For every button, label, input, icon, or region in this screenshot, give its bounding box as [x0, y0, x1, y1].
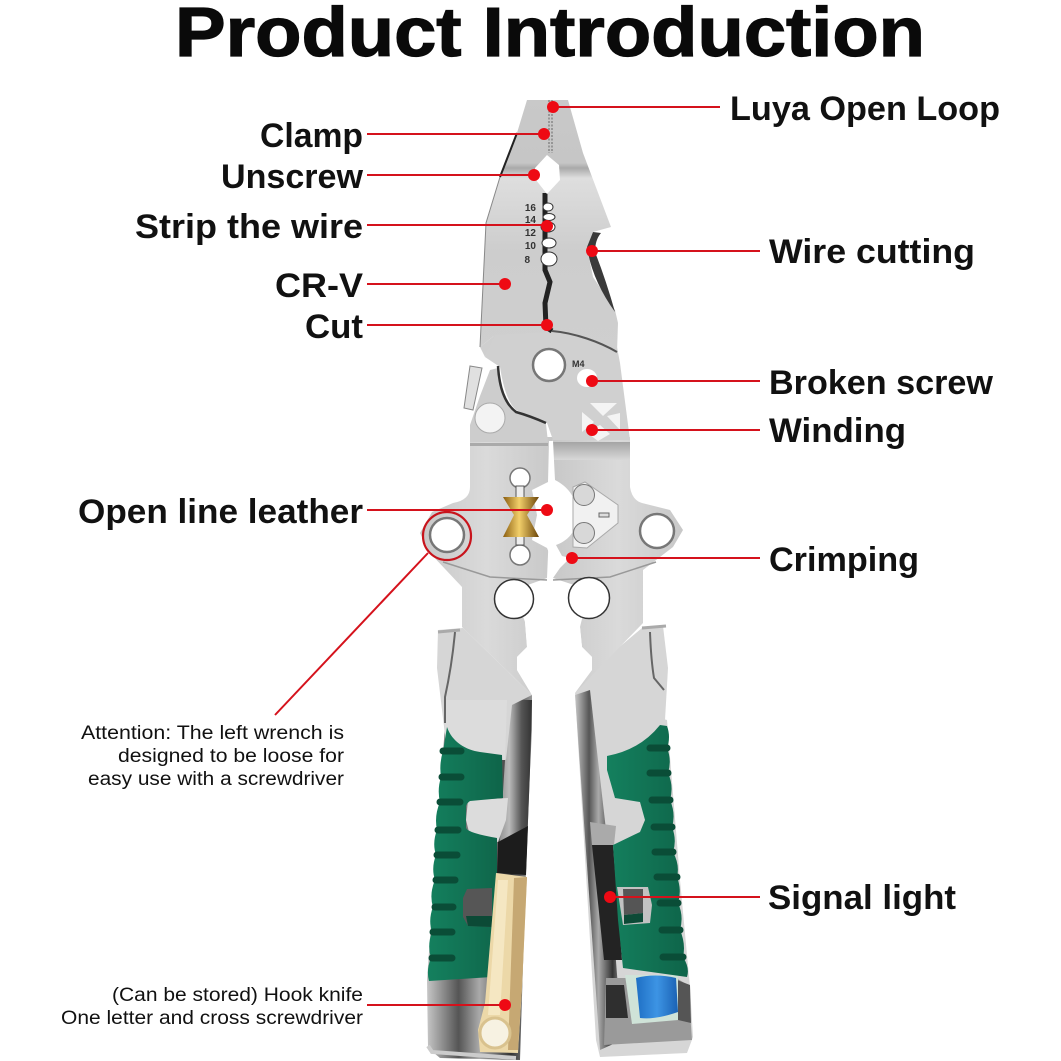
label: Open line leather: Open line leather [78, 493, 363, 531]
central gap [532, 441, 578, 578]
right handle [575, 626, 693, 1057]
cutting gap [545, 193, 552, 331]
gauge numbers: 14 [525, 215, 536, 226]
label: Luya Open Loop: Luya Open Loop [730, 90, 1000, 128]
illustration: wire pliers [420, 100, 693, 1060]
lower head [485, 329, 630, 440]
battery [636, 976, 678, 1018]
gauge numbers: 12 [525, 228, 536, 239]
gauge numbers [524, 203, 536, 266]
label: CR-V: CR-V [275, 267, 363, 305]
gauge numbers: 8 [524, 255, 530, 266]
label: Clamp [260, 117, 550, 155]
label: Signal light [604, 879, 956, 917]
label: Luya Open Loop [547, 90, 1000, 128]
lever base [470, 368, 548, 442]
callout: hook knife: One letter and cross screwdriver [61, 1008, 364, 1029]
label: Strip the wire [135, 208, 553, 246]
gauge numbers: 10 [525, 241, 536, 252]
grip slot right [617, 887, 652, 925]
label: Winding [586, 412, 906, 450]
gauge numbers: 16 [525, 203, 536, 214]
label: Signal light: Signal light [768, 879, 956, 917]
callout: attention note [81, 512, 471, 790]
plier body [420, 100, 683, 695]
label: Broken screw: Broken screw [769, 364, 994, 402]
label: Unscrew [221, 158, 540, 196]
callout: attention note: designed to be loose for [118, 746, 345, 767]
gold spool [503, 486, 539, 545]
left handle [427, 628, 532, 1060]
left lever [464, 366, 546, 433]
handle holes [430, 468, 674, 618]
M4 text: M4 [572, 359, 585, 369]
pivot hole [533, 349, 565, 381]
gauge holes [541, 203, 557, 266]
callout: hook knife: (Can be stored) Hook knife [112, 985, 363, 1006]
unscrew hole [535, 155, 560, 194]
label: Crimping: Crimping [769, 541, 919, 579]
label: Strip the wire: Strip the wire [135, 208, 363, 246]
grip slot left [463, 888, 492, 927]
hook knife body [478, 873, 527, 1053]
label: CR-V [275, 267, 511, 305]
callout: hook knife [61, 985, 511, 1029]
label: Wire cutting [586, 233, 975, 271]
label: Unscrew: Unscrew [221, 158, 364, 196]
M4 hole [577, 369, 597, 387]
green grip left [428, 727, 503, 981]
label: Wire cutting: Wire cutting [769, 233, 975, 271]
callout: attention note: easy use with a screwdriver [88, 769, 345, 790]
callout: attention note: Attention: The left wrench is [81, 723, 344, 744]
winding holes [582, 403, 620, 441]
wire cutting notch [587, 232, 615, 312]
right plate [573, 482, 618, 548]
green grip right [607, 725, 688, 977]
label: Cut [305, 308, 553, 346]
label: Clamp: Clamp [260, 117, 363, 155]
label: Cut: Cut [305, 308, 363, 346]
label: Winding: Winding [769, 412, 906, 450]
label: Crimping [566, 541, 919, 579]
upper jaw [480, 100, 618, 352]
label: Open line leather [78, 493, 553, 531]
label: Broken screw [586, 364, 994, 402]
